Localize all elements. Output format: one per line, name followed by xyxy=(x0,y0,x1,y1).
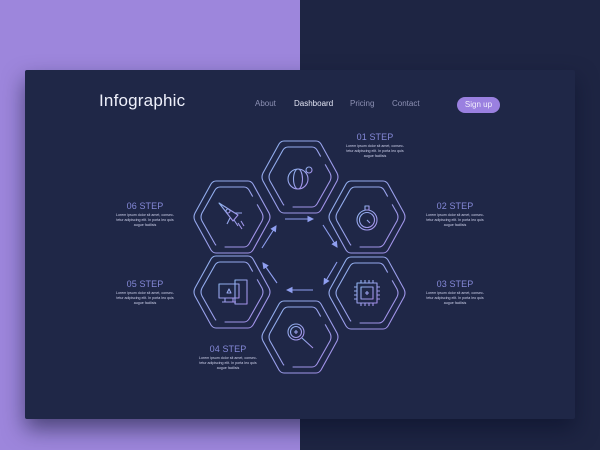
step 04 text: tetur adipiscing elit. In porta leo quis xyxy=(199,361,257,365)
step 05 text: tetur adipiscing elit. In porta leo quis xyxy=(116,296,174,300)
step 05 text xyxy=(116,279,174,305)
nav: dashboard: Dashboard xyxy=(294,99,333,108)
hex 01 globe xyxy=(262,141,338,213)
step 01 text: augue facilisis xyxy=(364,154,386,158)
arrows xyxy=(262,219,337,290)
hex 06 rocket xyxy=(194,181,270,253)
step 06 text: tetur adipiscing elit. In porta leo quis xyxy=(116,218,174,222)
step 01 text xyxy=(346,132,404,158)
hex 03 chip xyxy=(329,257,405,329)
step 03 text: Lorem ipsum dolor sit amet, consec- xyxy=(426,291,484,295)
step 01 text: tetur adipiscing elit. In porta leo quis xyxy=(346,149,404,153)
step 04 text: 04 STEP xyxy=(210,344,246,354)
hex 04 magnifier xyxy=(262,301,338,373)
step 03 text: augue facilisis xyxy=(444,301,466,305)
step 04 text: augue facilisis xyxy=(217,366,239,370)
sign up button xyxy=(457,97,500,113)
step 04 text: Lorem ipsum dolor sit amet, consec- xyxy=(199,356,257,360)
hex 02 stopwatch xyxy=(329,181,405,253)
step 03 text: tetur adipiscing elit. In porta leo quis xyxy=(426,296,484,300)
lavender background block xyxy=(0,0,300,450)
title: Infographic xyxy=(99,91,185,110)
step 03 text xyxy=(426,279,484,305)
step 05 text: 05 STEP xyxy=(127,279,163,289)
hex 05 computer xyxy=(194,256,270,328)
step 02 text: Lorem ipsum dolor sit amet, consec- xyxy=(426,213,484,217)
step 02 text: augue facilisis xyxy=(444,223,466,227)
step 04 text xyxy=(199,344,257,370)
step 05 text: augue facilisis xyxy=(134,301,156,305)
nav: contact: Contact xyxy=(392,99,420,108)
sign up button: Sign up xyxy=(465,100,492,109)
step 06 text: 06 STEP xyxy=(127,201,163,211)
nav: pricing: Pricing xyxy=(350,99,374,108)
step 05 text: Lorem ipsum dolor sit amet, consec- xyxy=(116,291,174,295)
card panel xyxy=(25,70,575,419)
step 03 text: 03 STEP xyxy=(437,279,473,289)
step 01 text: Lorem ipsum dolor sit amet, consec- xyxy=(346,144,404,148)
step 06 text xyxy=(116,201,174,227)
step 02 text xyxy=(426,201,484,227)
nav: about: About xyxy=(255,99,276,108)
step 06 text: augue facilisis xyxy=(134,223,156,227)
step 06 text: Lorem ipsum dolor sit amet, consec- xyxy=(116,213,174,217)
step 02 text: 02 STEP xyxy=(437,201,473,211)
step 02 text: tetur adipiscing elit. In porta leo quis xyxy=(426,218,484,222)
step 01 text: 01 STEP xyxy=(357,132,393,142)
